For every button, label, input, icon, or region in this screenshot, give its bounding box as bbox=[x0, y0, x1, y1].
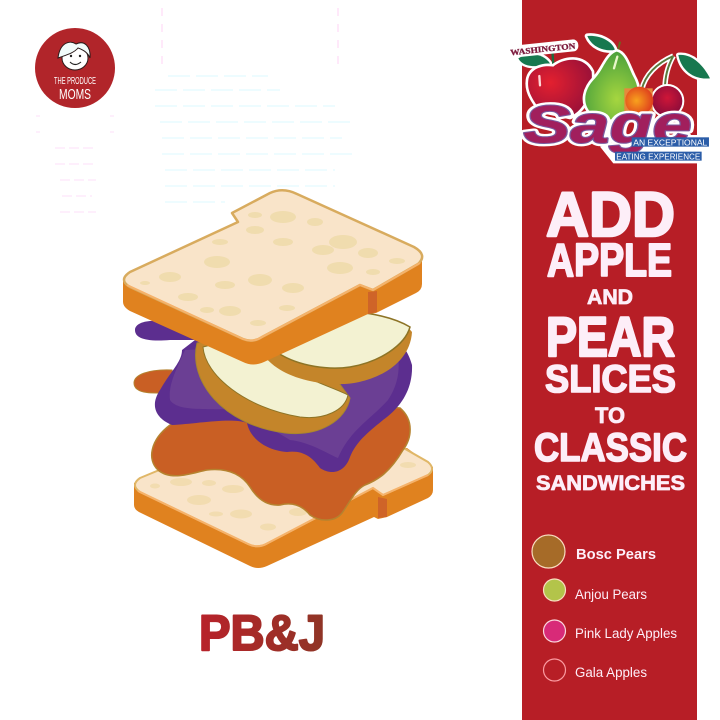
sidebar heading: AND bbox=[587, 286, 633, 309]
legend item: Pink Lady Apples: Pink Lady Apples bbox=[575, 626, 677, 641]
logo wordmark: Sage: Sage bbox=[523, 96, 692, 155]
sidebar heading: CLASSIC bbox=[534, 426, 687, 470]
peanut butter spread bbox=[152, 400, 410, 520]
legend item: Gala Apples bbox=[544, 659, 647, 681]
bottom bread slice bbox=[134, 420, 433, 568]
sidebar heading: APPLE bbox=[547, 234, 672, 286]
logo tagline top: AN EXCEPTIONAL bbox=[633, 138, 708, 147]
sidebar heading: SLICES bbox=[545, 358, 676, 401]
faint ghost artefacts on the white page bbox=[36, 8, 352, 212]
logo: The Produce Moms bbox=[35, 28, 115, 108]
legend item: Bosc Pears bbox=[532, 535, 656, 568]
legend item: Bosc Pears: Bosc Pears bbox=[576, 546, 656, 563]
icon: pear bbox=[585, 36, 638, 119]
logo wordmark: THE PRODUCE bbox=[54, 76, 96, 87]
icon: apple bbox=[518, 50, 592, 117]
legend item: Anjou Pears bbox=[544, 579, 647, 602]
jelly spread bbox=[135, 321, 412, 472]
logo wordmark halo: Sage bbox=[523, 96, 692, 155]
logo: Sage Fruit bbox=[506, 36, 713, 163]
sandwich title: PB&J bbox=[199, 605, 325, 661]
sidebar heading: ADD bbox=[546, 180, 675, 250]
logo: The Produce Moms: MOMS bbox=[59, 86, 91, 103]
panel: red sidebar bbox=[522, 0, 697, 720]
sandwich illustration bbox=[123, 190, 433, 568]
apple slice, lower left bbox=[196, 330, 350, 434]
logo tagline backing bbox=[600, 135, 713, 163]
icon: mom face bbox=[58, 42, 90, 70]
icon: cherries bbox=[624, 55, 710, 116]
sidebar heading: SANDWICHES bbox=[536, 472, 685, 495]
top bread slice bbox=[123, 190, 422, 364]
peanut butter blob bbox=[134, 370, 178, 393]
legend item: Pink Lady Apples bbox=[544, 620, 677, 642]
legend item: Gala Apples: Gala Apples bbox=[575, 665, 647, 680]
sidebar heading: PEAR bbox=[546, 305, 675, 368]
apple slice, upper right bbox=[265, 312, 412, 384]
logo label: Washington bbox=[506, 39, 579, 58]
logo label: Washington: WASHINGTON bbox=[510, 42, 576, 57]
legend item: Anjou Pears: Anjou Pears bbox=[575, 587, 647, 602]
legend bbox=[532, 535, 677, 681]
sidebar heading: TO bbox=[595, 403, 625, 428]
logo tagline bottom: EATING EXPERIENCE bbox=[616, 152, 700, 161]
sidebar heading bbox=[534, 180, 687, 495]
